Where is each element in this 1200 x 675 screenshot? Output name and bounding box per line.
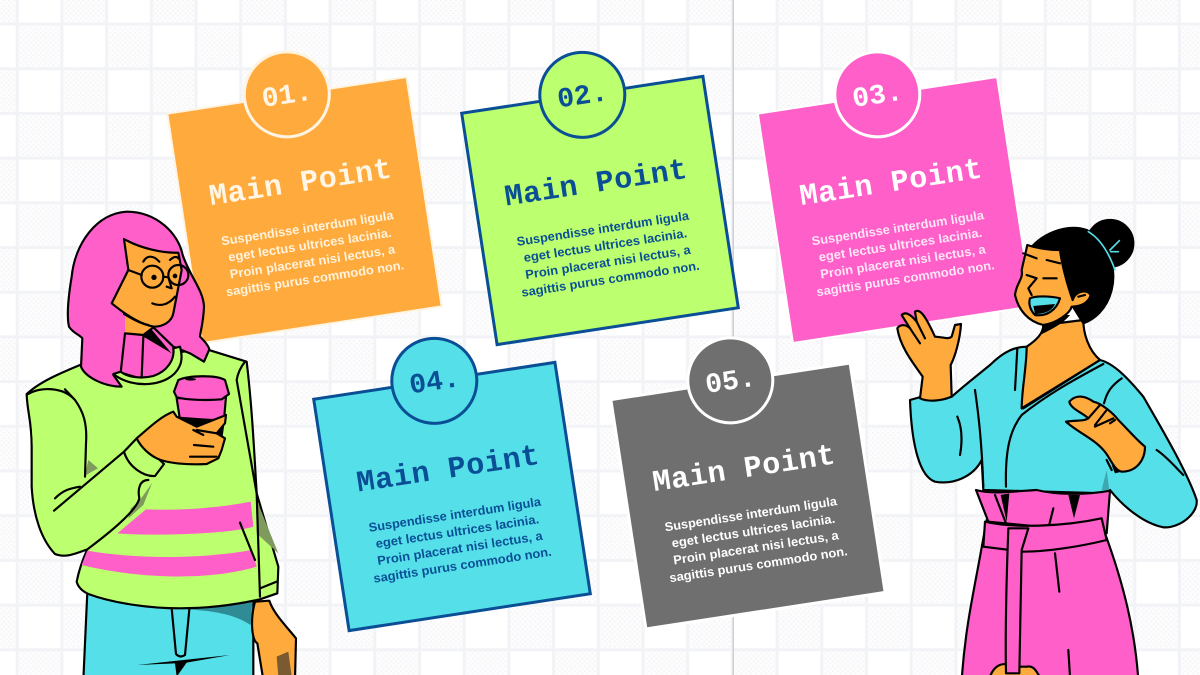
body text: card 04: Suspendisse interdum ligula xyxy=(368,495,543,535)
body text: card 05: sagittis purus commodo non. xyxy=(668,544,849,585)
body text: card 04: sagittis purus commodo non. xyxy=(372,545,553,586)
panel: card 03 pink xyxy=(751,34,1032,343)
illustration: laughing woman in robe xyxy=(897,220,1197,675)
body text: card 01: sagittis purus commodo non. xyxy=(225,258,405,299)
body text: card 03 xyxy=(808,208,996,299)
heading: card 03: Main Point xyxy=(798,154,985,215)
body text: card 02: Proin placerat nisi lectus, a xyxy=(524,243,693,282)
body text: card 01: eget lectus ultrices lacinia. xyxy=(227,226,392,264)
panel: card 02 green xyxy=(455,34,738,345)
badge: 02 xyxy=(534,46,631,143)
body text: card 05: eget lectus ultrices lacinia. xyxy=(671,512,836,550)
body text: card 02: eget lectus ultrices lacinia. xyxy=(523,226,688,265)
badge: 05 xyxy=(682,332,779,429)
body text: card 02: Suspendisse interdum ligula xyxy=(516,209,691,249)
illustration: woman with coffee cup xyxy=(27,212,296,675)
panel: card 05 gray xyxy=(604,320,885,629)
badge: 03: 03. xyxy=(850,78,905,116)
heading: card 04: Main Point xyxy=(355,440,542,502)
panel: card 01 orange xyxy=(161,34,442,343)
body text: card 05 xyxy=(661,494,849,585)
badge: 01: 01. xyxy=(260,78,314,116)
heading: card 02: Main Point xyxy=(503,154,690,216)
badge: 04 xyxy=(386,332,483,429)
body text: card 02 xyxy=(513,208,701,300)
body text: card 03: eget lectus ultrices lacinia. xyxy=(818,226,983,264)
badge: 05: 05. xyxy=(703,364,758,402)
body text: card 05: Proin placerat nisi lectus, a xyxy=(672,528,841,567)
body text: card 01 xyxy=(217,208,405,299)
body text: card 04: Proin placerat nisi lectus, a xyxy=(376,529,545,568)
panel: card 04 cyan xyxy=(307,320,590,631)
body text: card 01: Suspendisse interdum ligula xyxy=(220,208,395,248)
body text: card 02: sagittis purus commodo non. xyxy=(520,259,701,300)
heading: card 01: Main Point xyxy=(207,154,394,215)
badge: 02: 02. xyxy=(555,78,610,116)
body text: card 03: sagittis purus commodo non. xyxy=(815,258,996,299)
badge: 03 xyxy=(829,46,926,143)
body text: card 04: eget lectus ultrices lacinia. xyxy=(375,512,540,551)
badge: 01 xyxy=(238,46,335,143)
body text: card 01: Proin placerat nisi lectus, a xyxy=(229,242,397,281)
body text: card 03: Proin placerat nisi lectus, a xyxy=(819,242,988,281)
hair back xyxy=(68,212,209,387)
body text: card 03: Suspendisse interdum ligula xyxy=(811,208,986,248)
body text: card 04 xyxy=(365,494,553,586)
body text: card 05: Suspendisse interdum ligula xyxy=(664,494,839,534)
heading: card 05: Main Point xyxy=(651,440,838,501)
badge: 04: 04. xyxy=(407,364,462,402)
